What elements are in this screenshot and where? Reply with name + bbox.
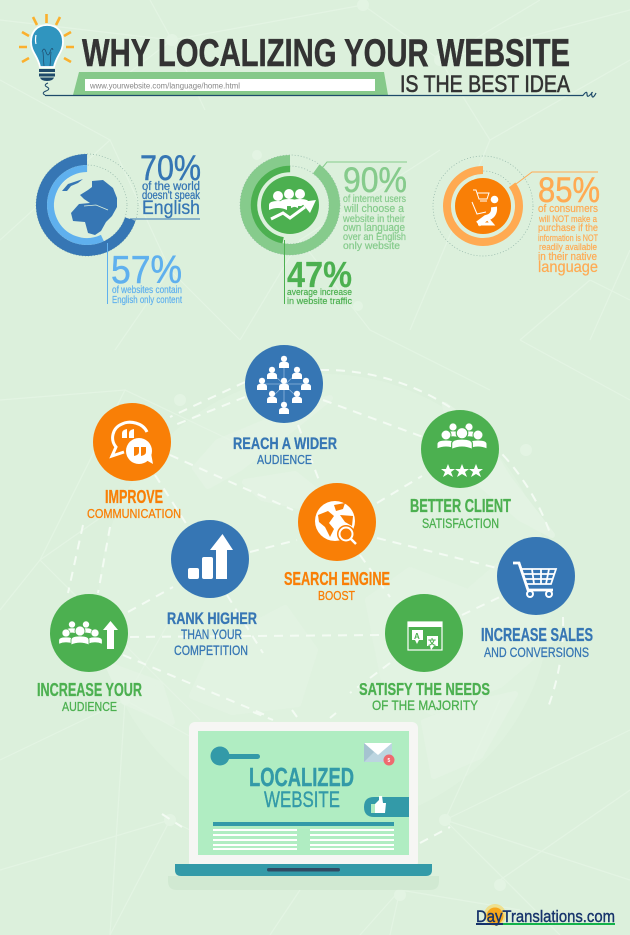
icon: envelope with badge: 5 <box>388 758 390 764</box>
stat: 85%: readily available <box>539 242 597 253</box>
logo underline <box>476 923 615 925</box>
stat: 47%: average increase <box>287 287 352 298</box>
stat: 90% <box>342 161 407 252</box>
stat: 85%: will NOT make a <box>538 214 598 225</box>
label: SATISFY THE NEEDS <box>359 679 490 699</box>
screen heading: LOCALIZED <box>249 762 354 792</box>
node: increase your audience <box>37 594 142 714</box>
icon: people network <box>245 345 323 423</box>
stat: 90%: website in their <box>342 213 405 225</box>
stat: 85%: information is NOT <box>538 233 598 243</box>
stat: 90%: will choose a <box>343 203 405 215</box>
label: AND CONVERSIONS <box>484 644 589 660</box>
icon: envelope with badge <box>364 743 394 766</box>
label: AUDIENCE <box>62 699 117 714</box>
stat: 70% <box>140 149 201 219</box>
trackpad notch <box>267 868 340 872</box>
node: reach a wider audience <box>233 345 337 467</box>
stat: 70%: 70% <box>140 149 201 188</box>
label: COMMUNICATION <box>87 506 181 521</box>
address bar banner <box>73 72 388 95</box>
stat: 70%: English <box>142 198 200 219</box>
icon: speech bubbles <box>93 403 171 481</box>
node: improve communication <box>87 403 181 521</box>
stat: 90%: of internet users <box>343 194 406 205</box>
label: SEARCH ENGINE <box>284 569 390 589</box>
stat: 85%: purchase if the <box>538 222 598 234</box>
node: better client satisfaction <box>410 410 511 531</box>
label <box>87 487 181 521</box>
stat: 70%: of the world <box>142 181 200 193</box>
label <box>410 496 511 531</box>
label <box>37 680 142 714</box>
label: IMPROVE <box>105 487 163 507</box>
node: rank higher than your competition <box>167 520 257 658</box>
stat: 57%: English only content <box>112 295 182 306</box>
address bar banner: www.yourwebsite.com/language/home.html <box>89 80 240 90</box>
label <box>359 679 490 713</box>
laptop: localized website <box>168 722 439 890</box>
label: RANK HIGHER <box>167 609 257 628</box>
icon: translation window: 文 <box>428 637 436 647</box>
node: search engine boost <box>284 483 390 603</box>
stat: 85% <box>538 171 600 276</box>
stat: 57%: of websites contain <box>112 285 182 296</box>
stat: 90%: only website <box>343 241 400 252</box>
icon: sun <box>484 904 506 926</box>
label <box>481 625 593 660</box>
laptop base <box>175 864 432 876</box>
label <box>167 609 257 658</box>
text lines <box>213 822 394 850</box>
icon: group with arrow <box>50 594 128 672</box>
screen heading: WEBSITE <box>264 787 340 812</box>
laptop shadow <box>168 876 439 890</box>
icon: translation window: A <box>414 632 420 641</box>
node: satisfy the needs of the majority <box>359 594 490 713</box>
stat: 85%: 85% <box>538 171 600 210</box>
logo: DayTranslations.com <box>476 904 615 926</box>
panel: 70% and 57% stats <box>30 148 201 306</box>
label: BETTER CLIENT <box>410 496 511 516</box>
panel: 90% and 47% stats <box>228 143 407 307</box>
label: THAN YOUR <box>181 626 242 642</box>
node: increase sales and conversions <box>481 537 593 660</box>
icon: key shape <box>210 746 260 766</box>
icon: like pill <box>364 796 409 817</box>
stat: 90%: own language <box>343 222 405 234</box>
laptop bezel <box>189 722 418 868</box>
stat: 57%: 57% <box>111 249 182 292</box>
panel: 85% stat <box>433 156 600 276</box>
laptop screen <box>198 731 409 855</box>
icon: globe and magnifier <box>298 483 376 561</box>
label: AUDIENCE <box>257 453 312 467</box>
stat: 90%: over an English <box>343 231 406 243</box>
icon: translation window <box>385 594 463 672</box>
label: OF THE MAJORITY <box>372 697 479 713</box>
icon: rising bars <box>171 520 249 598</box>
icon: group with stars <box>421 410 499 488</box>
stat: 70%: doesn't speak <box>142 190 200 202</box>
label: REACH A WIDER <box>233 434 337 453</box>
stat: 47%: 47% <box>287 254 352 295</box>
donut chart: globe <box>30 148 144 262</box>
underline flourish <box>45 92 596 97</box>
stat: 90%: 90% <box>343 161 407 200</box>
title block <box>19 14 596 98</box>
label: BOOST <box>318 588 355 603</box>
label: SATISFACTION <box>422 515 499 531</box>
stat: 47%: in website traffic <box>287 296 352 307</box>
stat: 85%: language <box>538 259 598 276</box>
label: INCREASE YOUR <box>37 680 142 700</box>
donut chart: shopper <box>433 156 533 256</box>
stat: 85%: in their native <box>538 251 597 263</box>
stat: 85%: of consumers <box>538 203 598 215</box>
label: COMPETITION <box>174 642 248 658</box>
screen heading <box>249 762 354 812</box>
background world map <box>99 374 552 826</box>
dashed connection lines <box>68 370 563 843</box>
icon: light bulb <box>19 14 74 95</box>
donut chart: audience growth <box>228 143 352 267</box>
label <box>284 569 390 603</box>
icon: shopping cart <box>497 537 575 615</box>
label <box>233 434 337 467</box>
subheading: IS THE BEST IDEA <box>400 71 570 98</box>
